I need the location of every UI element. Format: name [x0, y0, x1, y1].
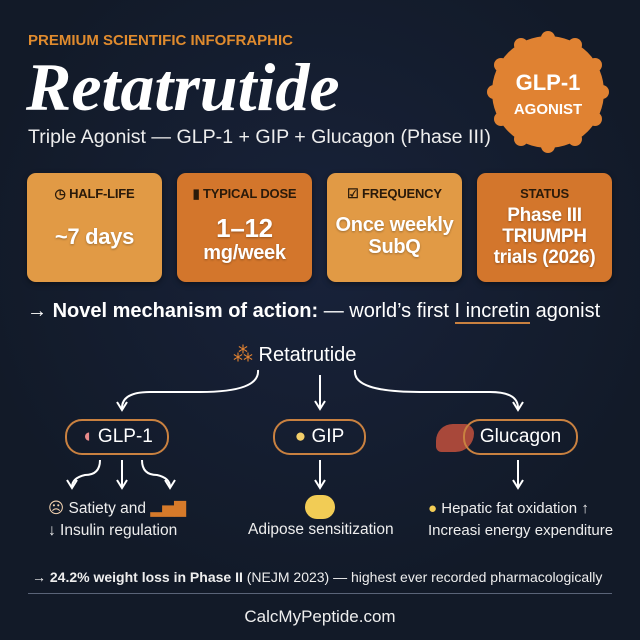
card: frequency: SubQ: [368, 236, 421, 258]
card: half-life: ◷ HALF-LIFE: [55, 186, 134, 201]
text: glucagon effects: [428, 500, 613, 539]
footer: CalcMyPeptide.com: [244, 607, 396, 626]
card: frequency: ☑ FREQUENCY: [347, 186, 442, 201]
text: GIP effect: Adipose sensitization: [248, 521, 394, 538]
card: status: STATUS: [520, 186, 569, 201]
card: half-life: [27, 173, 162, 282]
text: GLP-1 effects: ☹ Satiety and ▂▅▇: [48, 500, 186, 517]
text: GLP-1 effects: ↓ Insulin regulation: [48, 522, 177, 539]
card: typical dose: mg/week: [203, 242, 286, 264]
root node: Retatrutide: ⁂ Retatrutide: [233, 344, 356, 366]
card: frequency: Once weekly: [336, 214, 453, 236]
result line: → 24.2% weight loss in Phase II (NEJM 2023) — highest ever recorded pharmacologically: [32, 569, 602, 585]
card: typical dose: ▮ TYPICAL DOSE: [193, 186, 296, 201]
card: status: TRIUMPH: [502, 226, 587, 247]
badge: GLP-1 agonist: GLP-1: [516, 70, 580, 95]
badge: GLP-1 agonist: [487, 31, 609, 153]
subtitle: Triple Agonist — GLP-1 + GIP + Glucagon (Phase III): [28, 126, 491, 148]
card: status: [477, 173, 612, 282]
pill: GLP-1: ◖ GLP-1: [81, 426, 153, 447]
kicker: PREMIUM SCIENTIFIC INFOFRAPHIC: [28, 32, 293, 49]
badge: GLP-1 agonist: AGONIST: [514, 101, 582, 118]
card: status: Phase III: [507, 205, 582, 226]
text: GLP-1 effects: [48, 500, 186, 539]
pill: GIP: [273, 419, 366, 455]
text: glucagon effects: ● Hepatic fat oxidation ↑: [428, 500, 589, 517]
mechanism line: → Novel mechanism of action: — world’s first I incretin agonist: [27, 300, 600, 322]
pill: Glucagon: Glucagon: [480, 426, 561, 447]
pill: Glucagon: [463, 419, 578, 455]
card: typical dose: [177, 173, 312, 282]
card: frequency: [327, 173, 462, 282]
title: Retatrutide: [26, 49, 340, 125]
card: status: trials (2026): [494, 247, 595, 268]
pill: GIP: ● GIP: [295, 426, 344, 447]
pill: GLP-1: [65, 419, 169, 455]
card: typical dose: 1–12: [216, 213, 273, 243]
icon: liver: [436, 424, 474, 452]
text: glucagon effects: Increasi energy expenditure: [428, 522, 613, 539]
card: half-life: ~7 days: [55, 224, 134, 249]
icon: fat cells: [305, 495, 335, 519]
